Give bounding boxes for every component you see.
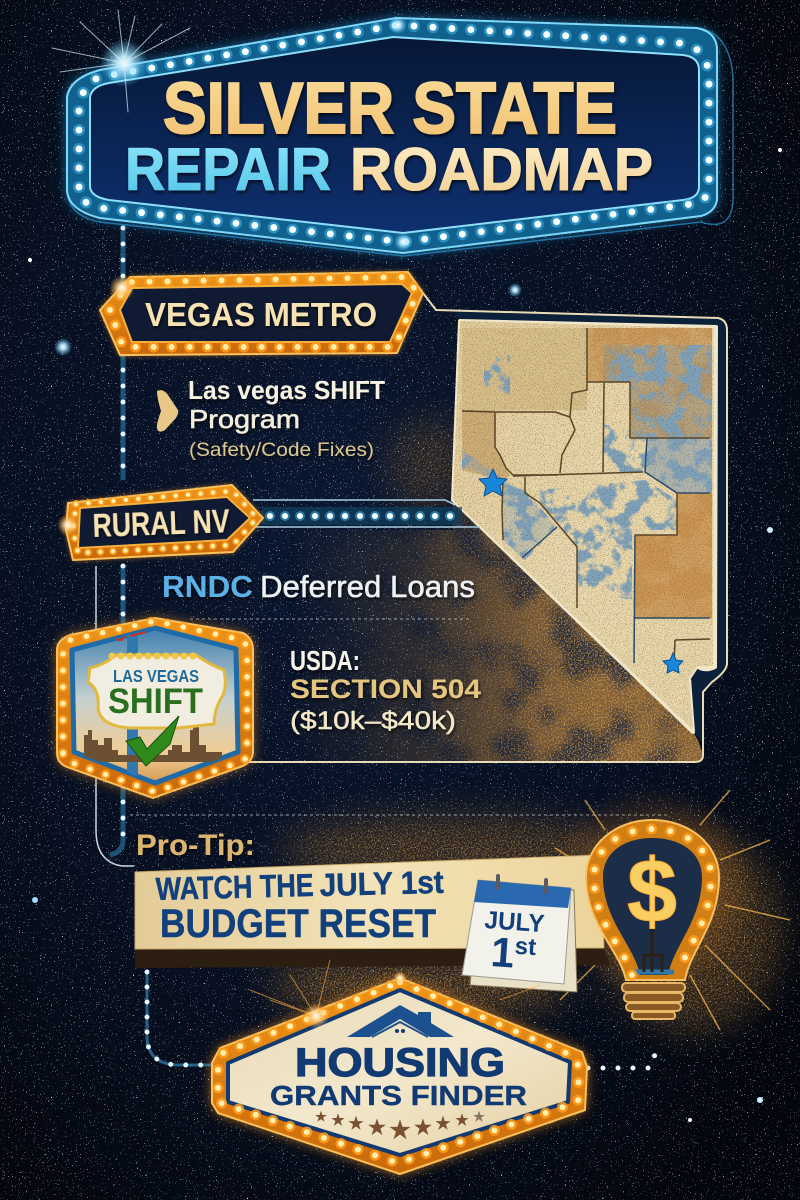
route trail: left dotted path: [96, 225, 655, 1068]
title text: SILVER STATE: [163, 69, 617, 149]
sign text: HOUSING: [295, 1041, 505, 1085]
bulb base: [622, 983, 685, 1019]
accent stars: [28, 148, 782, 1122]
calendar icon: 1: [489, 928, 516, 977]
Las Vegas sign: SHIFT: [108, 682, 203, 721]
calendar icon: [462, 876, 577, 992]
rating stars: ★: [435, 1114, 451, 1133]
budget banner: [135, 855, 610, 968]
plaque label: RURAL NV: [92, 502, 230, 544]
title panel: [90, 37, 699, 233]
USDA text: [290, 645, 481, 735]
rating stars: ★: [389, 1117, 411, 1144]
calendar icon: st: [514, 933, 537, 961]
title sign: [52, 10, 733, 256]
rating stars: ★: [473, 1109, 485, 1124]
Nevada map: [450, 320, 720, 740]
title text: ROADMAP: [350, 136, 653, 203]
rating stars: ★: [368, 1117, 386, 1139]
map terrain: [450, 320, 720, 740]
map star: Las Vegas: [663, 653, 683, 673]
badge scene: [84, 626, 222, 776]
check mark: [126, 716, 179, 766]
USDA text: ($10k–$40k): [290, 707, 456, 735]
program text: Program: [189, 404, 300, 434]
sign text: [270, 1041, 527, 1111]
dollar sign: $: [627, 842, 677, 942]
map outer frame: [238, 293, 727, 762]
Rural connector: [253, 500, 480, 527]
Vegas Metro plaque: [100, 272, 423, 355]
roof icon: [347, 1005, 454, 1037]
RNDC text: Deferred Loans: [260, 569, 475, 604]
program text: [188, 375, 385, 461]
title text: [125, 69, 653, 203]
Rural NV plaque: [57, 485, 263, 560]
light bulb bursts: [540, 785, 790, 1030]
banner text: JULY 1st: [319, 864, 444, 903]
rating stars: ★: [348, 1114, 364, 1133]
program text: (Safety/Code Fixes): [189, 440, 374, 461]
title sparkle flare: [52, 10, 412, 251]
rating stars: [315, 1109, 485, 1144]
sign text: GRANTS FINDER: [270, 1080, 527, 1111]
banner text: [155, 864, 444, 946]
bulb marquee lights: [594, 829, 711, 975]
light bulb icon: [586, 820, 719, 1019]
Las Vegas sign: [88, 655, 225, 728]
rating stars: ★: [315, 1109, 327, 1124]
USDA text: USDA:: [290, 645, 360, 676]
plaque bulbs: [110, 277, 417, 347]
county lines: [462, 328, 710, 664]
title marquee bulbs: [79, 25, 709, 242]
banner text: BUDGET RESET: [160, 902, 436, 946]
rating stars: ★: [455, 1112, 469, 1129]
RNDC text: [162, 569, 475, 604]
title text: REPAIR: [125, 136, 331, 203]
map star: Reno: [479, 469, 507, 496]
RNDC text: RNDC: [162, 569, 253, 604]
rating stars: ★: [331, 1112, 345, 1129]
rating stars: ★: [414, 1117, 432, 1139]
chevron icon: [157, 390, 178, 432]
USDA text: SECTION 504: [290, 674, 481, 704]
plaque bulbs: [73, 491, 257, 553]
program text: Las vegas SHIFT: [188, 375, 385, 405]
lower map panel texture: [310, 503, 702, 761]
banner text: WATCH THE: [155, 867, 314, 907]
Vegas program item: [157, 375, 385, 461]
plaque label: VEGAS METRO: [145, 296, 377, 333]
sign bulbs: [218, 982, 579, 1163]
Housing Grants Finder sign: [212, 960, 587, 1174]
Pro-Tip heading: Pro-Tip:: [136, 829, 255, 862]
Las Vegas SHIFT badge: [57, 618, 253, 798]
Las Vegas sign: LAS VEGAS: [113, 666, 199, 686]
calendar icon: JULY: [484, 906, 546, 938]
badge marquee bulbs: [63, 621, 247, 792]
